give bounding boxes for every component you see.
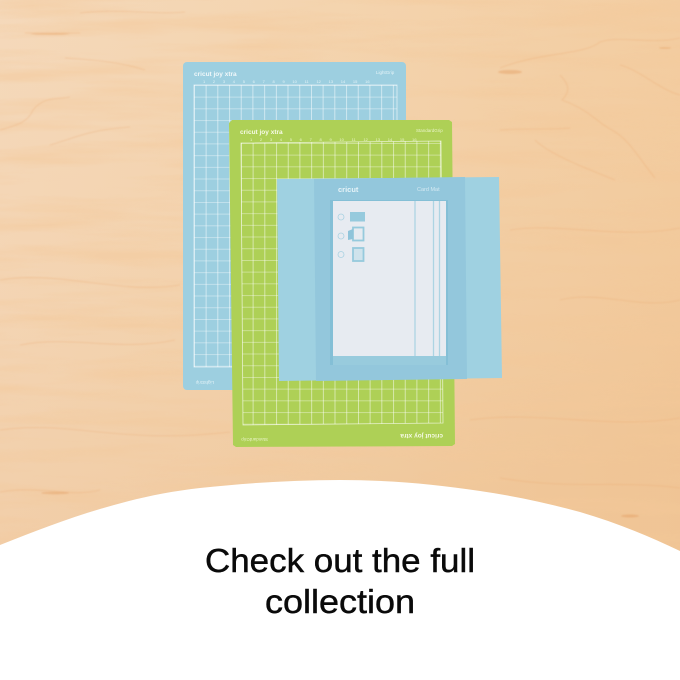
- step 2 icon: [338, 228, 364, 240]
- heading: [205, 542, 475, 620]
- mat label: Card Mat: [417, 187, 440, 193]
- brand label: cricut: [338, 185, 359, 194]
- panel: blue LightGrip mat: [183, 62, 406, 390]
- darker centre panel: [314, 177, 467, 381]
- column numbers: 1 2 3 4 5 6 7 8 9 10 11 12 13 14 15 16: [203, 79, 370, 84]
- heading: collection: [265, 583, 415, 620]
- window lower strip: [333, 356, 446, 365]
- card window: [330, 200, 448, 365]
- score lines: [415, 201, 440, 356]
- heading: Check out the full: [205, 542, 475, 579]
- step 3 icon: [338, 248, 364, 261]
- rotated grip label: LightGrip: [195, 380, 214, 385]
- brand label: cricut joy xtra: [194, 71, 237, 78]
- step 1 icon: [338, 212, 365, 222]
- panel: Card Mat: [277, 177, 502, 381]
- column numbers: 1 2 3 4 5 6 7 8 9 10 11 12 13 14 15 16: [250, 137, 417, 142]
- white curved panel: [0, 480, 680, 680]
- rotated brand label: cricut joy xtra: [400, 432, 443, 439]
- rotated grip label: StandardGrip: [241, 437, 268, 442]
- grip label: LightGrip: [376, 70, 395, 75]
- panel: green StandardGrip mat: [229, 120, 455, 447]
- brand label: cricut joy xtra: [240, 129, 283, 136]
- grip label: StandardGrip: [416, 128, 443, 133]
- mat grid: [194, 85, 397, 367]
- white card area: [333, 201, 446, 356]
- mat grid: [241, 141, 443, 425]
